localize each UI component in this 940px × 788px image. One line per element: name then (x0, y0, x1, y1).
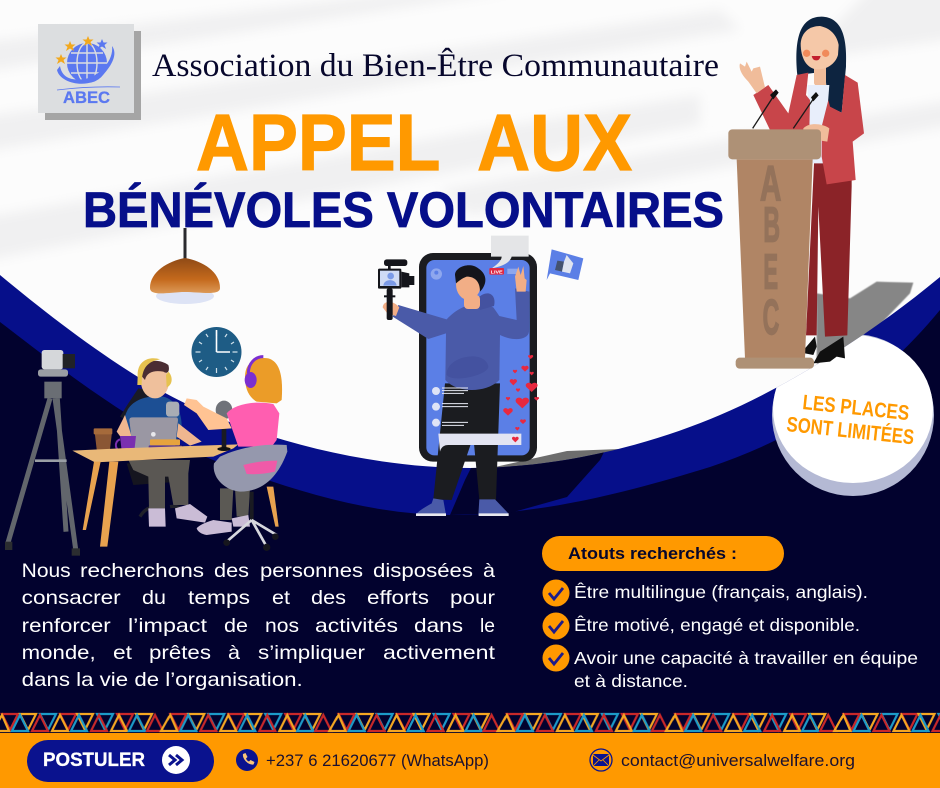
title: bénévoles volontaires: BÉNÉVOLES VOLONTAIRES (83, 182, 724, 238)
floor shadow: phone (495, 449, 620, 478)
tribal pattern ribbon (0, 712, 940, 733)
icon: mail (590, 749, 612, 771)
hearts (503, 355, 539, 431)
woman chair (214, 445, 287, 551)
live badge (489, 268, 517, 275)
floor shadow: speaker (817, 282, 913, 364)
description paragraph: activités (315, 615, 398, 637)
comment box (438, 434, 521, 452)
podium: B (763, 198, 780, 253)
description paragraph: et (113, 642, 133, 664)
logo: ABEC (63, 88, 110, 107)
microphones (753, 89, 819, 128)
vlog camera (378, 259, 414, 320)
description paragraph: de (224, 615, 248, 637)
tripod camera (5, 350, 80, 556)
description paragraph: nos (265, 615, 299, 637)
description paragraph: monde, (22, 642, 96, 664)
description paragraph: des (311, 587, 346, 609)
title: appel aux: APPEL AUX (196, 98, 632, 187)
icon: phone (236, 749, 258, 771)
phone (419, 253, 537, 462)
description paragraph: s’impliquer (258, 642, 366, 664)
checklist text (574, 582, 918, 691)
email address: contact@universalwelfare.org (621, 751, 855, 770)
illustration: live streamer in phone (378, 236, 583, 516)
description paragraph: dans la vie de l’organisation. (22, 669, 303, 691)
description paragraph: disposées (373, 560, 473, 582)
podium: C (763, 290, 779, 345)
logo (38, 24, 141, 120)
checklist (542, 580, 918, 691)
description paragraph: temps (188, 587, 250, 609)
podium: A (760, 156, 781, 211)
checklist text: Avoir une capacité à travailler en équipe (574, 648, 918, 668)
description paragraph: personnes (260, 560, 363, 582)
heading pill: atouts (542, 536, 784, 571)
badge: limited places (772, 334, 934, 496)
checklist text: Être motivé, engagé et disponible. (574, 615, 860, 635)
office chair (120, 388, 150, 420)
description paragraph: à (228, 642, 240, 664)
heading pill: atouts: Atouts recherchés : (568, 544, 737, 563)
description paragraph: l’impact (128, 615, 208, 637)
description paragraph: dans (414, 615, 463, 637)
speaker (740, 17, 864, 363)
man (117, 358, 207, 527)
woman (184, 357, 282, 535)
desk (72, 444, 279, 547)
footer bar (0, 733, 940, 788)
description paragraph: le (480, 615, 495, 637)
illustration: podcast scene (5, 350, 287, 556)
live badge: LIVE (491, 269, 503, 275)
comment list (432, 387, 468, 427)
button: postuler: POSTULER (43, 749, 145, 771)
microphone (216, 401, 232, 451)
speech bubble (491, 236, 529, 268)
description paragraph: renforcer (22, 615, 111, 637)
description paragraph: consacrer (22, 587, 121, 609)
thumbs up (547, 249, 583, 280)
check icons (542, 580, 570, 672)
button: postuler (27, 740, 214, 782)
icon: pendant lamp (150, 228, 220, 304)
desk items (129, 417, 178, 448)
description paragraph: à (483, 560, 495, 582)
description paragraph: recherchons (80, 560, 204, 582)
dark navy ground (0, 310, 940, 788)
checklist text: Être multilingue (français, anglais). (574, 582, 868, 602)
badge: limited places: LES PLACES (801, 391, 910, 425)
description paragraph: des (214, 560, 249, 582)
description paragraph: prêtes (149, 642, 211, 664)
description paragraph: et (272, 587, 291, 609)
person (383, 265, 529, 516)
description paragraph: activement (383, 642, 496, 664)
blue wave band (0, 275, 940, 788)
podium (728, 129, 821, 369)
description paragraph: Nous (22, 560, 71, 582)
description paragraph: du (142, 587, 166, 609)
dark shadow on band (450, 452, 604, 515)
description paragraph: pour (450, 587, 496, 609)
description paragraph: efforts (367, 587, 429, 609)
organisation name: Association du Bien-Être Communautaire (152, 47, 719, 84)
icon: wall clock (192, 327, 242, 377)
phone number: +237 6 21620677 (WhatsApp) (266, 751, 489, 770)
description paragraph (22, 560, 496, 691)
checklist text: et à distance. (574, 671, 688, 691)
illustration: speaker at podium (728, 17, 864, 369)
podium: E (763, 245, 778, 300)
